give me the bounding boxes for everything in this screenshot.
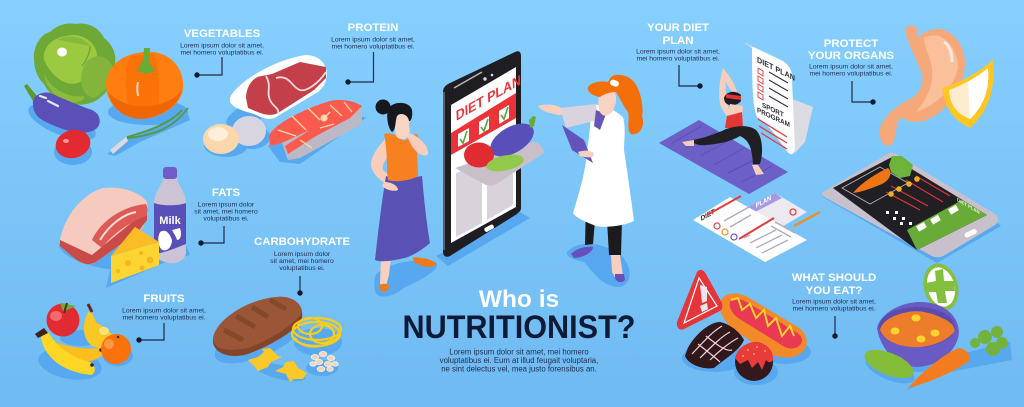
heading: vegetables (180, 28, 264, 78)
icon: red meat (230, 55, 327, 119)
heading: fruits: FRUITS (143, 293, 185, 305)
hair (376, 100, 412, 132)
plus badge (918, 259, 964, 315)
heading: protein (331, 22, 415, 85)
illustration: tablet with diet app (822, 153, 1001, 263)
heading: your diet plan: Lorem ipsum dolor sit amet, (636, 48, 720, 56)
cucumber (861, 344, 917, 384)
shield (942, 60, 994, 128)
illustration: unhealthy food (677, 270, 811, 385)
hand holding tablet (578, 151, 594, 157)
heading: protect your organs (808, 38, 894, 105)
heading: fruits: Lorem ipsum dolor sit amet, (122, 308, 206, 314)
illustration: nutritionist doctor (538, 75, 643, 287)
description text: voluptatibus ei. Eum at illud feugait voluptaria, (440, 356, 598, 365)
mat (659, 120, 788, 194)
hand (382, 182, 398, 191)
bowl of food (877, 302, 959, 367)
illustration: diet plan document: PROGRAM (757, 107, 790, 129)
diet plan header: DIET PLAN (455, 71, 521, 124)
icon: bananas (35, 328, 103, 375)
icon: eggplant (24, 84, 100, 133)
icon: orange (101, 334, 131, 364)
diet sheet: DIET (700, 208, 716, 223)
face and neck (393, 110, 410, 139)
heading: protein: PROTEIN (348, 22, 398, 34)
heading: what should you eat: Lorem ipsum dolor sit amet, (792, 298, 876, 306)
arm outstretched (560, 104, 598, 128)
illustration: fats (56, 167, 190, 288)
legs (585, 203, 622, 255)
description text: Lorem ipsum dolor sit amet, mei homero (449, 348, 589, 356)
icon: salmon steak (269, 100, 362, 160)
illustration: stomach with shield (880, 26, 994, 146)
illustration: woman client (371, 100, 437, 297)
chocolate candy (685, 322, 744, 368)
heading: protect your organs: PROTECT (824, 38, 878, 50)
description text: ne sint delectus vel, mea justo forensibus an. (441, 364, 597, 374)
heading: what should you eat: WHAT SHOULD (792, 272, 876, 284)
illustration: smartphone diet plan (436, 51, 544, 266)
title: Who is (479, 286, 559, 313)
legs (380, 258, 391, 286)
icon: cabbage (34, 23, 115, 105)
icon: noodles (292, 318, 341, 347)
heading: fats (194, 187, 258, 246)
heading: what should you eat: YOU EAT? (806, 285, 862, 297)
illustration: tablet with diet app: DIET PLAN (957, 197, 980, 216)
heading: fats: sit amet, mei homero (194, 208, 258, 216)
woman in yoga pose (682, 68, 764, 175)
pencil (794, 212, 820, 226)
description text (440, 348, 598, 374)
icon: spring onion (110, 108, 188, 154)
illustration: protein (203, 55, 366, 164)
illustration: vegetables (24, 23, 190, 165)
icon: pear (84, 304, 115, 348)
illustration: carbohydrates (209, 297, 342, 385)
icon: tomato (53, 126, 93, 162)
title: NUTRITIONIST? (402, 309, 636, 345)
icon: pumpkin (106, 48, 183, 119)
heading: protein: mei homero voluptatibus ei. (331, 44, 415, 50)
shoes (379, 257, 436, 292)
stomach (880, 26, 965, 146)
heading: fats: voluptatibus ei. (203, 216, 249, 222)
heading: your diet plan: PLAN (662, 35, 694, 47)
heading: carbohydrate: Lorem ipsum dolor (274, 251, 331, 258)
head (598, 90, 616, 116)
heading: carbohydrate: CARBOHYDRATE (254, 236, 350, 248)
heading: what should you eat: mei homero voluptatibus ei. (792, 306, 876, 312)
heading: protect your organs: Lorem ipsum dolor sit amet, (809, 64, 893, 70)
heading: your diet plan: mei homero voluptatibus ei. (636, 56, 720, 62)
illustration: healthy food (861, 259, 1012, 390)
heading: protect your organs: mei homero voluptatibus ei. (809, 70, 893, 78)
heading: carbohydrate: voluptatibus ei. (279, 265, 325, 272)
carrot on screen (853, 156, 913, 193)
home button (484, 224, 495, 233)
heading: your diet plan: YOUR DIET (647, 22, 709, 34)
illustration: diet sheets and pencil (693, 193, 820, 262)
heading: protect your organs: YOUR ORGANS (808, 50, 894, 62)
illustration: yoga on mat (659, 68, 788, 194)
tray with food (455, 116, 544, 186)
icon: eggs (203, 116, 266, 154)
icon: meat cut (60, 188, 148, 264)
heading: your diet plan (636, 22, 720, 89)
illustration: diet plan document (745, 43, 813, 154)
heading: protein: Lorem ipsum dolor sit amet, (331, 36, 415, 44)
red band with checks (451, 93, 516, 155)
heading: fruits: mei homero voluptatibus ei. (122, 314, 206, 322)
plan sheet: PLAN (755, 194, 772, 210)
heading: fats: FATS (212, 187, 241, 199)
icon: beans (310, 351, 338, 372)
illustration: diet plan document: SPORT (762, 102, 784, 119)
clipboard tablet (562, 125, 593, 163)
hot dog (720, 294, 807, 358)
heading: vegetables: mei homero voluptatibus ei. (180, 50, 264, 56)
heading: carbohydrate: sit amet, mei homero (270, 258, 334, 265)
illustration: diet plan document: DIET PLAN (757, 55, 795, 83)
heading: what should you eat (792, 272, 876, 339)
skirt (375, 176, 430, 261)
orange hair (588, 75, 643, 134)
icon: farfalle pasta (248, 348, 307, 382)
icon: cheese (111, 227, 159, 283)
grey panels (456, 163, 482, 237)
icon: apple (46, 303, 80, 336)
arm left (371, 138, 396, 187)
icon: bread loaf (213, 297, 302, 356)
white coat (573, 105, 634, 227)
warning sign (677, 270, 722, 330)
arm right (407, 133, 428, 156)
shoes (571, 247, 625, 282)
heading: vegetables: Lorem ipsum dolor sit amet, (180, 42, 264, 50)
hand (538, 105, 562, 115)
title (402, 286, 636, 345)
illustration: fruits (35, 303, 133, 384)
heading: vegetables: VEGETABLES (184, 28, 261, 40)
heading: fruits (122, 293, 206, 343)
heading: carbohydrate (254, 236, 350, 296)
heading: fats: Lorem ipsum dolor (198, 202, 255, 208)
chocolate ball (735, 342, 773, 381)
icon: milk bottle: Milk (159, 215, 182, 227)
carrot (908, 326, 1008, 388)
orange top (384, 133, 418, 181)
